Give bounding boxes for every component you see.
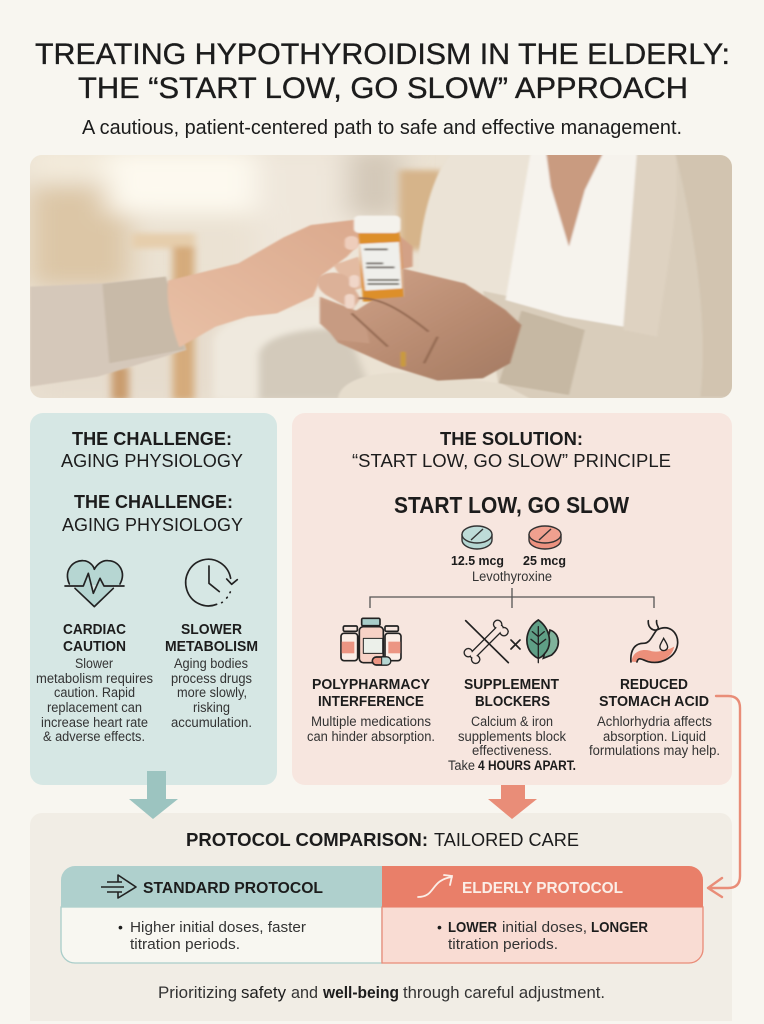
reduced stomach acid text: STOMACH ACID: [599, 693, 709, 710]
supplement blockers text: Calcium & iron: [471, 714, 553, 729]
icon: clock: [186, 559, 237, 606]
supplement blockers text: SUPPLEMENT: [464, 676, 559, 693]
elderly body: [382, 907, 703, 963]
comparison heading: [186, 830, 579, 850]
cardiac caution text: [36, 621, 153, 744]
icon: coral pill: [529, 526, 561, 549]
slower metabolism text: more slowly,: [177, 685, 247, 700]
slower metabolism text: SLOWER: [181, 621, 242, 638]
standard text: [118, 919, 306, 953]
elderly header: [382, 866, 703, 907]
reduced stomach acid text: absorption. Liquid: [603, 729, 706, 744]
icon: stomach: [631, 621, 678, 662]
supplement blockers text: BLOCKERS: [475, 693, 550, 710]
panel: protocol comparison: [30, 813, 732, 1021]
dose labels: Levothyroxine: [472, 569, 552, 584]
reduced stomach acid text: Achlorhydria affects: [597, 714, 712, 729]
supplement blockers text: 4 HOURS APART.: [478, 758, 576, 773]
elderly text: LONGER: [591, 919, 648, 936]
slower metabolism text: Aging bodies: [174, 656, 248, 671]
elderly text: LOWER: [448, 919, 497, 936]
icon: teal pill: [462, 526, 492, 549]
elderly text: [437, 919, 648, 953]
column: elderly protocol: [382, 866, 703, 963]
standard text: Higher initial doses, faster: [130, 919, 306, 936]
polypharmacy text: INTERFERENCE: [318, 693, 424, 710]
icon: heart with pulse: [65, 561, 124, 607]
elderly text: •: [437, 919, 442, 935]
bottle: [354, 216, 405, 302]
icon: crossed bone and leaf: [464, 620, 558, 664]
dose labels: 25 mcg: [523, 553, 566, 568]
cardiac caution text: CARDIAC: [63, 621, 126, 638]
reduced stomach acid text: REDUCED: [620, 676, 688, 693]
closing statement: [158, 983, 605, 1002]
standard text: •: [118, 919, 123, 935]
polypharmacy text: POLYPHARMACY: [312, 676, 430, 693]
photo: hands passing a pill bottle: [30, 150, 737, 403]
closing statement: Prioritizing: [158, 983, 237, 1002]
reduced stomach acid text: [589, 676, 720, 758]
cardiac caution text: & adverse effects.: [43, 729, 145, 744]
closing statement: safety: [241, 983, 286, 1002]
cardiac caution text: replacement can: [47, 700, 142, 715]
challenge heading: THE CHALLENGE:: [72, 429, 232, 449]
cardiac caution text: caution. Rapid: [54, 685, 135, 700]
panel: the solution: [292, 413, 732, 785]
panel background: [292, 413, 732, 785]
polypharmacy text: can hinder absorption.: [307, 729, 435, 744]
closing statement: and: [291, 983, 318, 1002]
polypharmacy text: [307, 676, 435, 744]
subtitle: A cautious, patient-centered path to safe and effective management.: [82, 117, 682, 139]
cardiac caution text: metabolism requires: [36, 671, 153, 686]
elderly label: ELDERLY PROTOCOL: [462, 880, 623, 897]
challenge heading repeated: [62, 492, 243, 535]
reduced stomach acid text: formulations may help.: [589, 743, 720, 758]
supplement blockers text: [448, 676, 576, 773]
supplement blockers text: supplements block: [458, 729, 566, 744]
elderly text: titration periods.: [448, 936, 558, 953]
comparison heading: TAILORED CARE: [434, 830, 579, 850]
slower metabolism text: risking: [193, 700, 230, 715]
dose labels: [451, 553, 566, 584]
challenge heading: AGING PHYSIOLOGY: [61, 451, 243, 471]
solution heading: “START LOW, GO SLOW” PRINCIPLE: [352, 451, 671, 471]
title: TREATING HYPOTHYROIDISM IN THE ELDERLY:: [35, 38, 730, 71]
panel background: [30, 813, 732, 1021]
polypharmacy text: Multiple medications: [311, 714, 431, 729]
closing statement: well-being: [322, 983, 399, 1002]
panel background: [30, 413, 277, 785]
icon: medicine bottles: [341, 618, 401, 665]
standard label: STANDARD PROTOCOL: [143, 880, 323, 897]
title: [35, 38, 730, 105]
standard body: [61, 907, 382, 963]
helper arm and hand: [30, 219, 413, 387]
cardiac caution text: Slower: [75, 656, 113, 671]
title: THE “START LOW, GO SLOW” APPROACH: [78, 72, 688, 105]
challenge heading repeated: AGING PHYSIOLOGY: [62, 515, 243, 535]
solution heading: THE SOLUTION:: [440, 429, 583, 449]
arrow: challenge to comparison: [129, 771, 178, 819]
challenge heading repeated: THE CHALLENGE:: [74, 492, 233, 512]
supplement blockers text: effectiveness.: [472, 743, 552, 758]
icon: fast arrow: [101, 875, 136, 898]
standard text: titration periods.: [130, 936, 240, 953]
cardiac caution text: increase heart rate: [41, 715, 148, 730]
arrow: stomach acid to elderly protocol: [708, 696, 740, 897]
supplement blockers text: Take: [448, 758, 475, 773]
slower metabolism text: METABOLISM: [165, 638, 258, 655]
arrow: solution to comparison: [488, 785, 537, 819]
start low go slow heading: START LOW, GO SLOW: [394, 492, 629, 518]
patient torso: [338, 153, 737, 400]
challenge heading: [61, 429, 243, 471]
connector tree: [370, 588, 654, 608]
cardiac caution text: CAUTION: [63, 638, 126, 655]
slower metabolism text: process drugs: [171, 671, 252, 686]
comparison heading: PROTOCOL COMPARISON:: [186, 830, 428, 850]
slower metabolism text: [165, 621, 258, 730]
standard header: [61, 866, 382, 907]
icon: gradual curve arrow: [418, 875, 452, 897]
solution heading: [352, 429, 671, 471]
panel: the challenge: [30, 413, 277, 785]
closing statement: through careful adjustment.: [403, 983, 605, 1002]
slower metabolism text: accumulation.: [171, 715, 252, 730]
column: standard protocol: [61, 866, 382, 963]
patient hand: [317, 236, 521, 381]
dose labels: 12.5 mcg: [451, 553, 504, 568]
elderly text: initial doses,: [502, 919, 587, 936]
